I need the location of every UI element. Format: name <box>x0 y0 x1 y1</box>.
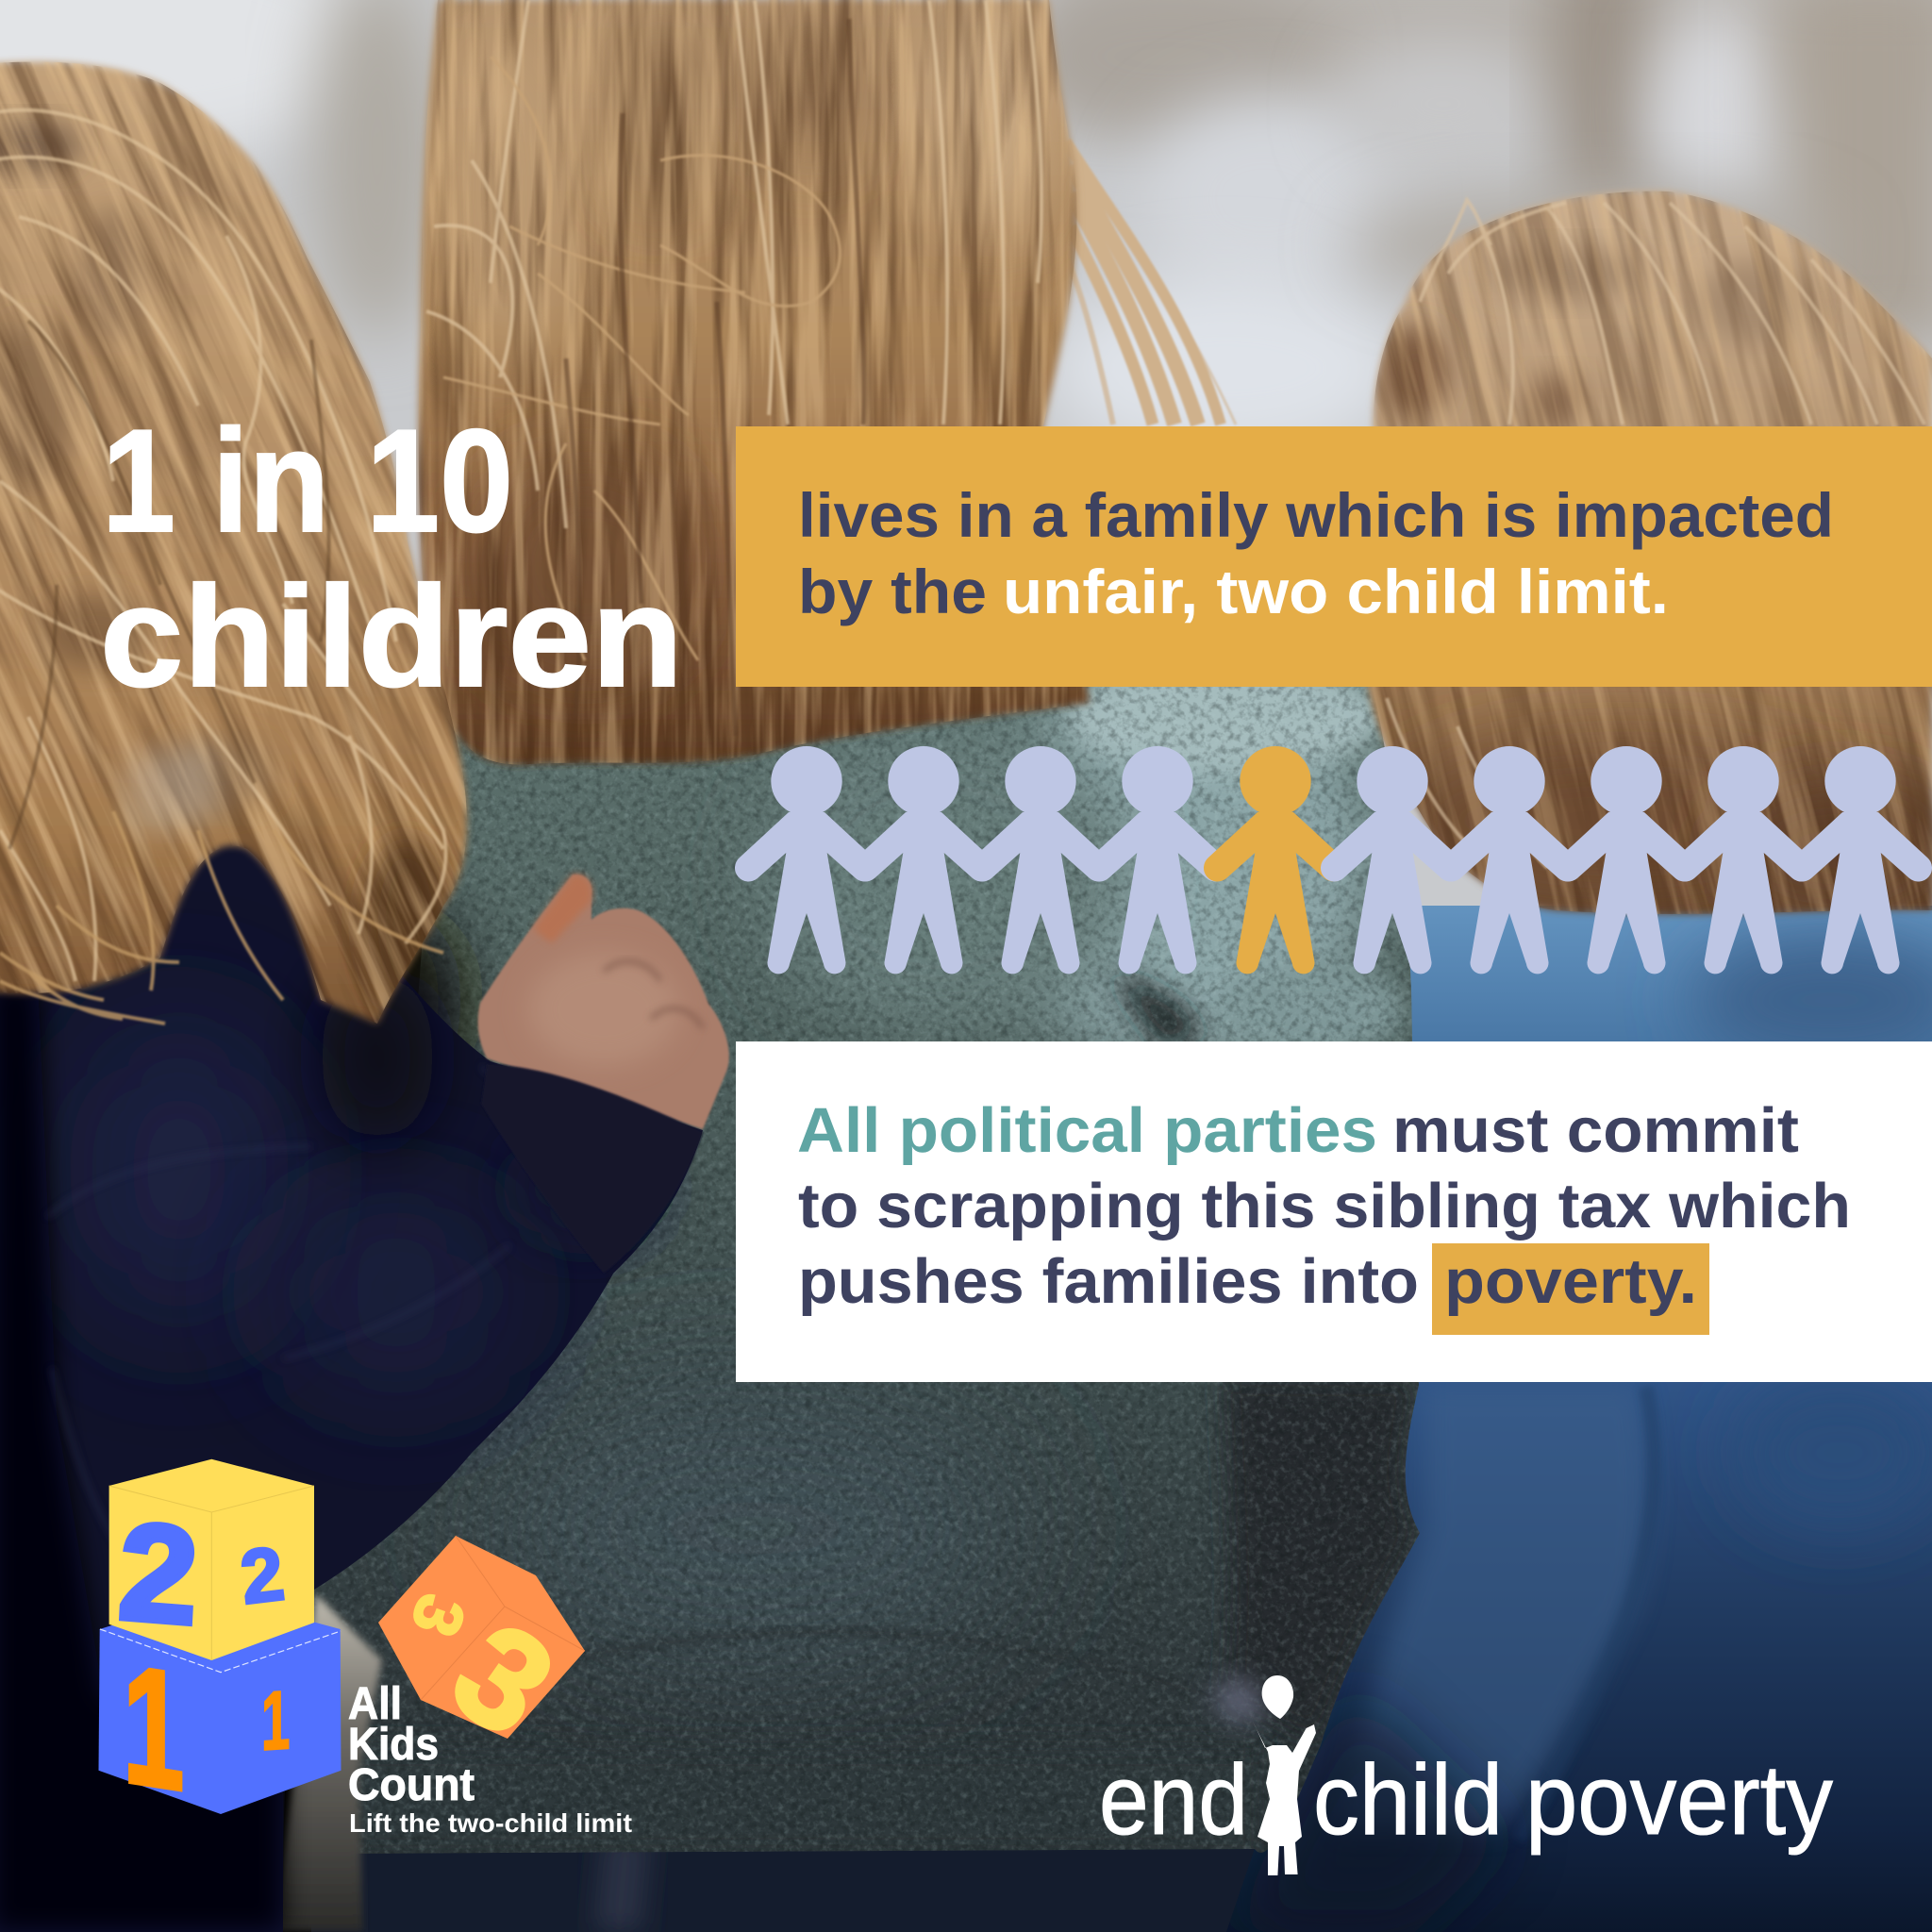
icon: yellow block 2: 2 <box>236 1531 289 1621</box>
gold panel line 2 white part: unfair, two child limit. <box>1003 557 1669 626</box>
left child's hair <box>0 57 472 1026</box>
logo: All Kids Count <box>98 1459 632 1838</box>
icon: yellow block 2 <box>109 1459 314 1660</box>
wordmark poverty: poverty <box>1525 1744 1833 1856</box>
icon: blue block 1: 1 <box>123 1630 184 1827</box>
white panel line 1 dark: must commit <box>1392 1095 1799 1166</box>
icon: orange block 3 <box>378 1536 585 1766</box>
wordmark Count: Count <box>348 1760 475 1810</box>
white panel line 1 teal: All political parties <box>797 1095 1377 1166</box>
child's hand <box>478 874 729 1129</box>
blue jumper of right child <box>1179 906 1932 1932</box>
figure 8 <box>1555 746 1698 974</box>
figure 1 <box>735 746 878 974</box>
green fluffy sweater <box>283 651 1443 1868</box>
icon: child with balloon <box>1253 1675 1316 1875</box>
jeans pocket detail <box>594 1835 651 1932</box>
gold panel line 1: lives in a family which is impacted <box>798 480 1834 550</box>
gold panel line 2 dark part: by the <box>798 557 987 626</box>
figure 2 <box>852 746 995 974</box>
highlight behind poverty <box>1432 1243 1709 1335</box>
dark shadow between children <box>283 896 462 1104</box>
icon: orange block 3: 3 <box>396 1585 480 1646</box>
centre hair wispy loops <box>443 57 840 660</box>
windblown hair tip strands <box>1066 142 1236 425</box>
icon: blue block 1: 1 <box>261 1674 290 1768</box>
paper chain of ten children, one highlighted <box>735 746 1932 974</box>
panel: gold statement <box>736 426 1932 687</box>
figure 7 <box>1438 746 1581 974</box>
icon: blue block 1 <box>98 1594 341 1827</box>
wordmark end: end <box>1099 1744 1248 1856</box>
icon: orange block 3: 3 <box>425 1591 581 1766</box>
wordmark All: All <box>348 1679 402 1729</box>
left hair dark strands <box>9 321 329 849</box>
blurred sky backdrop <box>0 0 1932 943</box>
white panel line 3: pushes families into <box>798 1246 1419 1317</box>
right child's hair <box>1364 189 1932 921</box>
faint white collar of left child <box>127 745 222 835</box>
bright strands falling over navy jumper <box>0 811 443 1024</box>
highlighted word poverty: poverty. <box>1444 1246 1697 1317</box>
figure 6 <box>1321 746 1464 974</box>
navy jumper body and sleeve of left child <box>0 830 703 1932</box>
centre child's hair <box>283 0 1236 849</box>
figure 9 <box>1672 746 1815 974</box>
panel: white call to action <box>736 1041 1932 1382</box>
centre hair light strands <box>426 0 1041 528</box>
headline line 1: 1 in 10 <box>102 399 513 562</box>
tagline: Lift the two-child limit <box>349 1808 632 1838</box>
figure 5 highlighted <box>1204 746 1347 974</box>
centre hair dark strands <box>566 19 864 736</box>
white panel line 2: to scrapping this sibling tax which <box>798 1171 1851 1241</box>
left hair light strands <box>0 110 446 981</box>
figure 4 <box>1086 746 1229 974</box>
figure 10 <box>1789 746 1932 974</box>
headline line 2: children <box>100 557 683 717</box>
figure 3 <box>969 746 1112 974</box>
right hair flyaway strands <box>1387 200 1924 868</box>
logo: end child poverty <box>1099 1675 1833 1875</box>
wordmark child: child <box>1313 1744 1503 1856</box>
icon: yellow block 2: 2 <box>115 1494 201 1654</box>
headline: 1 in 10 children <box>100 399 683 717</box>
navy sleeve cuff <box>481 1064 703 1274</box>
blue jumper folds <box>1231 934 1932 1932</box>
wordmark Kids: Kids <box>348 1720 439 1770</box>
jeans <box>311 1821 1264 1932</box>
white shirt patch near waist <box>1207 1674 1269 1726</box>
